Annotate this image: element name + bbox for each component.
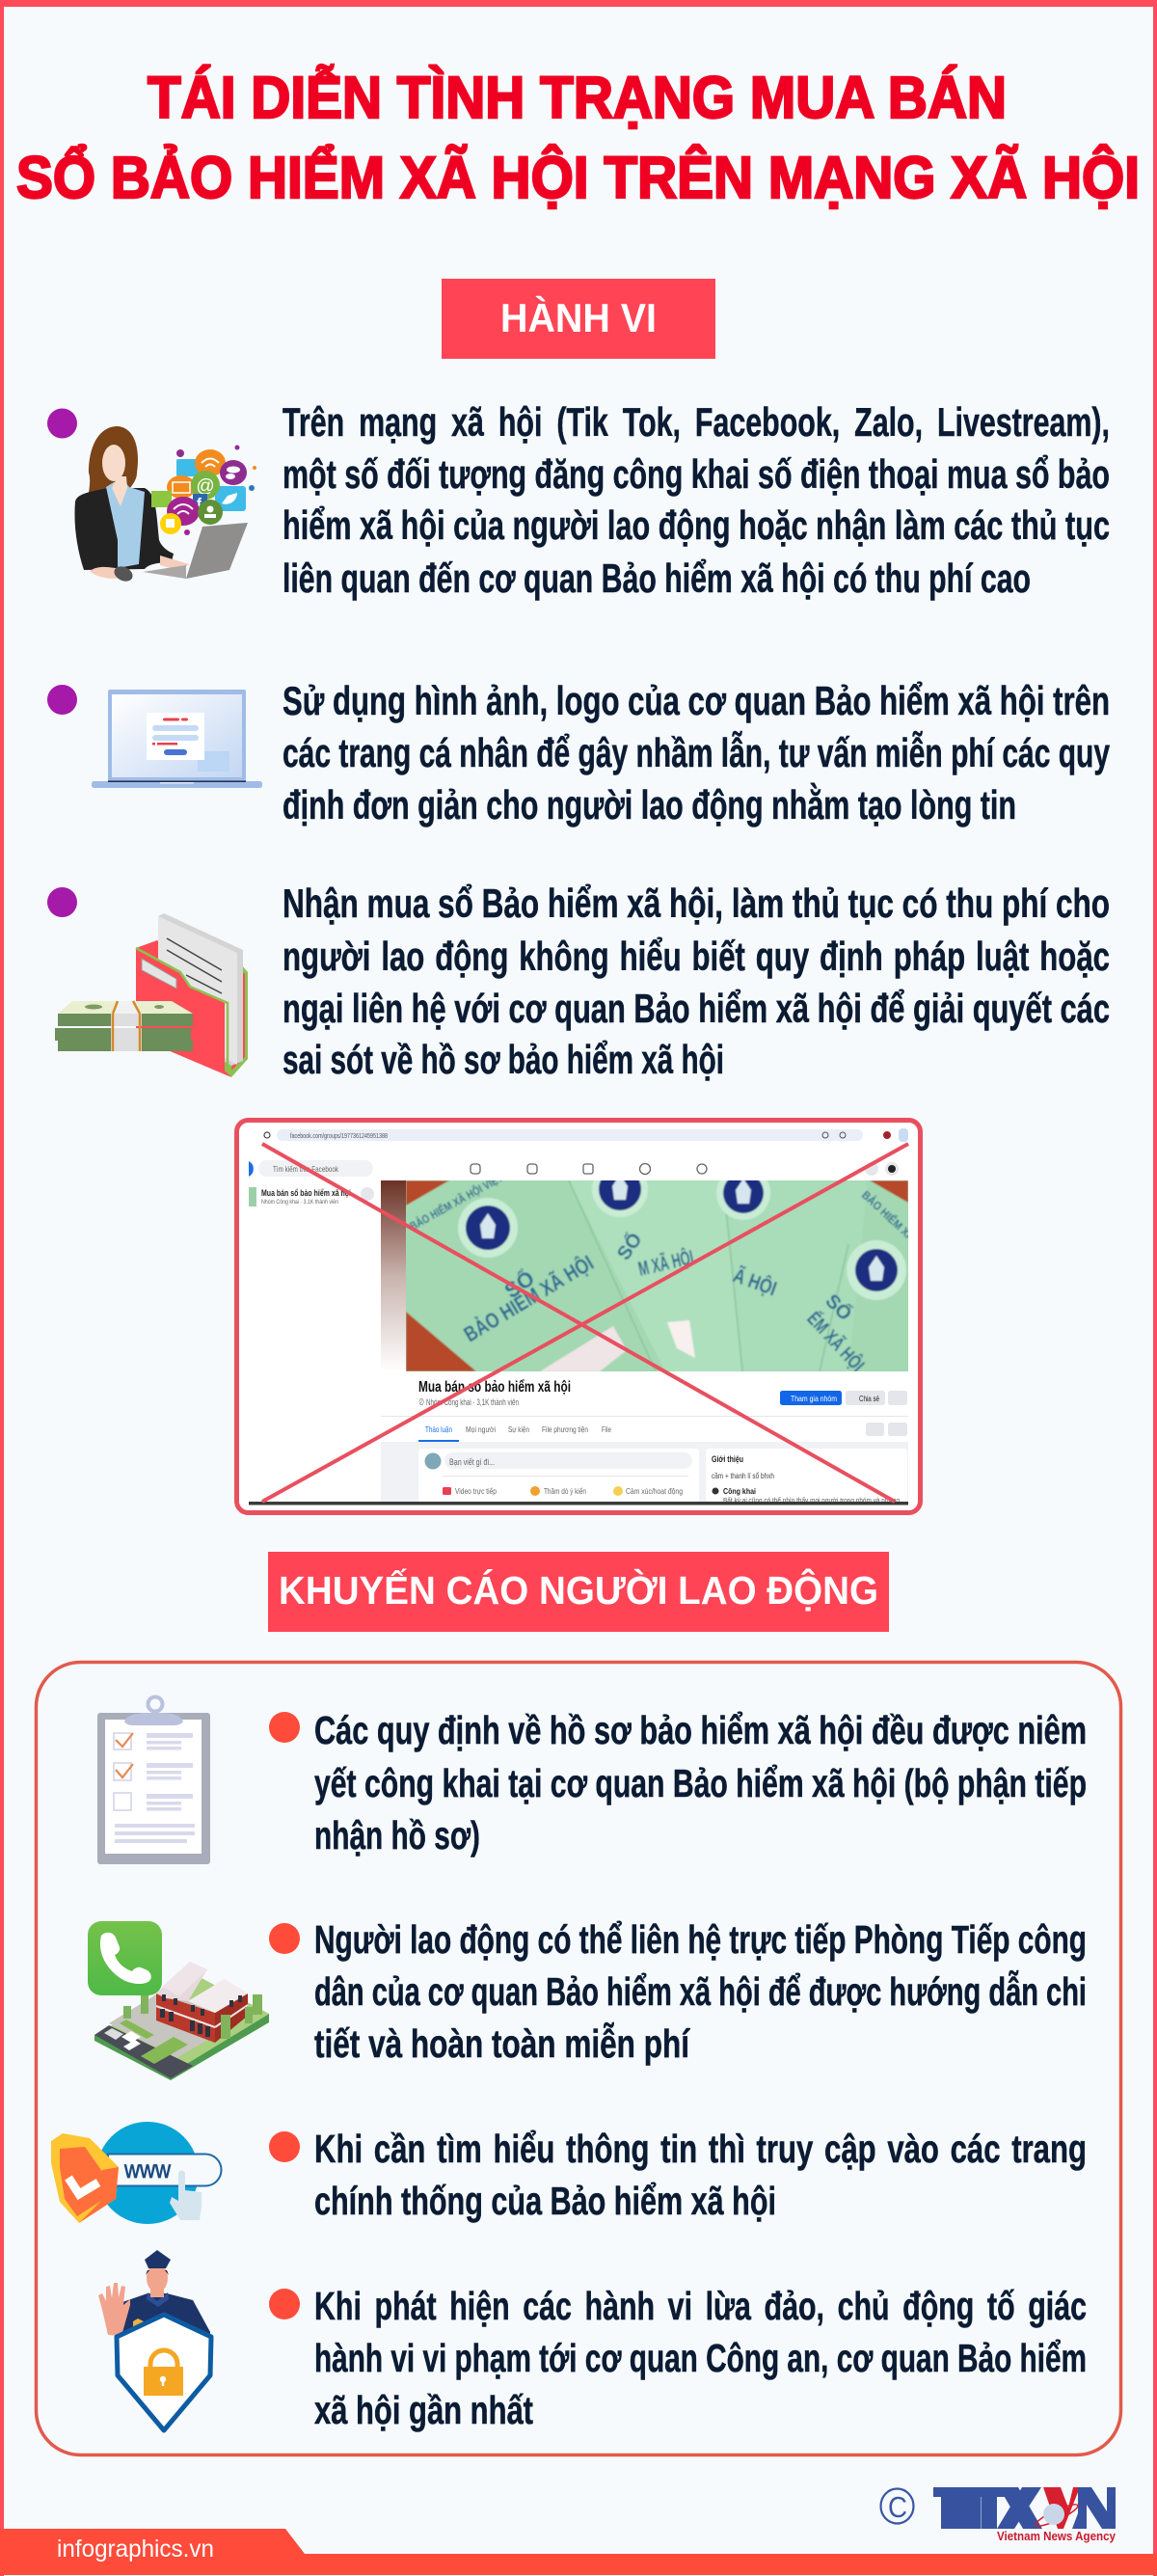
text: advice 4: [314, 2284, 1087, 2432]
icon: building with phone app: [88, 1921, 269, 2080]
screenshot: crossed-out Facebook group: BẢO HIỂM XÃ: [859, 1187, 919, 1244]
heading: hành vi: HÀNH VI: [500, 295, 657, 340]
icon: clipboard checklist: [97, 1697, 210, 1864]
logo: TTXVN copyright: [881, 2487, 1117, 2543]
screenshot: crossed-out Facebook group: BẢO HIỂM XÃ HỘI VIỆT: [407, 1170, 505, 1234]
screenshot: crossed-out Facebook group: Tìm kiếm trên Facebook: [273, 1164, 339, 1174]
screenshot: crossed-out Facebook group: Mua bán sổ bảo hiểm xã hội: [418, 1378, 571, 1396]
text: behaviour 3: [283, 881, 1110, 1082]
screenshot: crossed-out Facebook group: Chia sẻ: [859, 1394, 879, 1403]
text: advice 1: [314, 1708, 1087, 1857]
screenshot: crossed-out Facebook group: File phương tiện: [542, 1424, 588, 1434]
text: advice 4: xã hội gần nhất: [314, 2388, 533, 2432]
screenshot: crossed-out Facebook group: cầm + thanh lí sổ bhxh: [712, 1472, 774, 1480]
bullet 3: [47, 887, 77, 917]
logo: TTXVN copyright: Vietnam News Agency: [997, 2529, 1117, 2543]
bullet: advice 3: [269, 2131, 300, 2162]
text: advice 2: [314, 1917, 1087, 2066]
heading: khuyến cáo người lao động: [268, 1552, 889, 1632]
screenshot: crossed-out Facebook group: File: [602, 1424, 611, 1434]
screenshot: crossed-out Facebook group: ẾM XÃ HỘI: [802, 1307, 870, 1376]
title: TÁI DIỄN TÌNH TRẠNG MUA BÁN: [148, 65, 1007, 130]
screenshot: crossed-out Facebook group: Thăm dò ý kiến: [544, 1486, 586, 1496]
footer band: [0, 2529, 1157, 2575]
bullet: advice 2: [269, 1923, 300, 1954]
screenshot: crossed-out Facebook group: BẢO HIỂM XÃ HỘI: [460, 1251, 598, 1346]
screenshot: crossed-out Facebook group: SỔ: [611, 1228, 647, 1264]
screenshot: crossed-out Facebook group: SỔ: [500, 1265, 539, 1303]
bullet: advice 1: [269, 1712, 300, 1743]
screenshot: crossed-out Facebook group: ⊘ Nhóm Công khai · 3,1K thành viên: [418, 1397, 519, 1407]
title: [16, 65, 1140, 210]
text: advice 1: nhận hồ sơ): [314, 1813, 480, 1857]
panel: recommendations: [37, 1663, 1120, 2455]
screenshot: crossed-out Facebook group: Ã HỘI: [730, 1263, 780, 1300]
screenshot: crossed-out Facebook group: Thảo luận: [425, 1424, 452, 1434]
bullet 2: [47, 685, 77, 715]
screenshot: crossed-out Facebook group: Bất kỳ ai cũng có thể nhìn thấy mọi người trong nhóm và những: [723, 1496, 900, 1505]
icon: laptop with login form: [92, 690, 262, 788]
logo: TTXVN copyright: C: [888, 2490, 907, 2524]
screenshot: crossed-out Facebook group: facebook.com/groups/1977361245951388: [290, 1131, 388, 1140]
bullet 1: [47, 409, 77, 438]
icon: police officer with shield: [98, 2250, 211, 2430]
screenshot: crossed-out Facebook group: Mua bán sổ bảo hiểm xã hội: [261, 1188, 351, 1199]
screenshot: crossed-out Facebook group: Sự kiện: [508, 1424, 529, 1434]
icon: woman at laptop with social media icons: [74, 426, 256, 584]
heading: hành vi: [442, 279, 715, 359]
screenshot: crossed-out Facebook group: Bạn viết gì đi...: [449, 1457, 495, 1467]
text: advice 3: [314, 2127, 1087, 2223]
icon: woman at laptop with social media icons: f: [197, 496, 202, 512]
screenshot: crossed-out Facebook group: Giới thiệu: [712, 1454, 743, 1464]
icon: woman at laptop with social media icons: @: [196, 476, 215, 497]
screenshot: crossed-out Facebook group: Cảm xúc/hoạt động: [626, 1486, 683, 1496]
screenshot: crossed-out Facebook group: M XÃ HỘI: [636, 1245, 696, 1281]
footer band: infographics.vn: [57, 2535, 214, 2562]
text: advice 3: chính thống của Bảo hiểm xã hội: [314, 2179, 776, 2223]
text: advice 2: tiết và hoàn toàn miễn phí: [314, 2021, 690, 2066]
screenshot: crossed-out Facebook group: Mọi người: [466, 1424, 496, 1434]
text: behaviour 3: sai sót về hồ sơ bảo hiểm xã hội: [283, 1037, 724, 1082]
icon: folder of documents with money stacks: [55, 913, 248, 1077]
bullet: advice 4: [269, 2289, 300, 2319]
screenshot: crossed-out Facebook group: SỔ: [821, 1289, 857, 1325]
screenshot: crossed-out Facebook group: [237, 1121, 920, 1512]
text: behaviour 1: [283, 399, 1110, 601]
screenshot: crossed-out Facebook group: Nhóm Công khai · 3,1K thành viên: [261, 1199, 338, 1206]
red cross lines: [262, 1144, 908, 1502]
screenshot: crossed-out Facebook group: Tham gia nhóm: [791, 1394, 837, 1403]
text: behaviour 2: [283, 678, 1110, 827]
screenshot: crossed-out Facebook group: Video trực tiếp: [455, 1486, 497, 1496]
heading: khuyến cáo người lao động: KHUYẾN CÁO NGƯỜI LAO ĐỘNG: [279, 1568, 878, 1613]
icon: secure website: [51, 2122, 222, 2224]
screenshot: crossed-out Facebook group: Công khai: [723, 1486, 756, 1496]
icon: secure website: www: [123, 2156, 172, 2183]
